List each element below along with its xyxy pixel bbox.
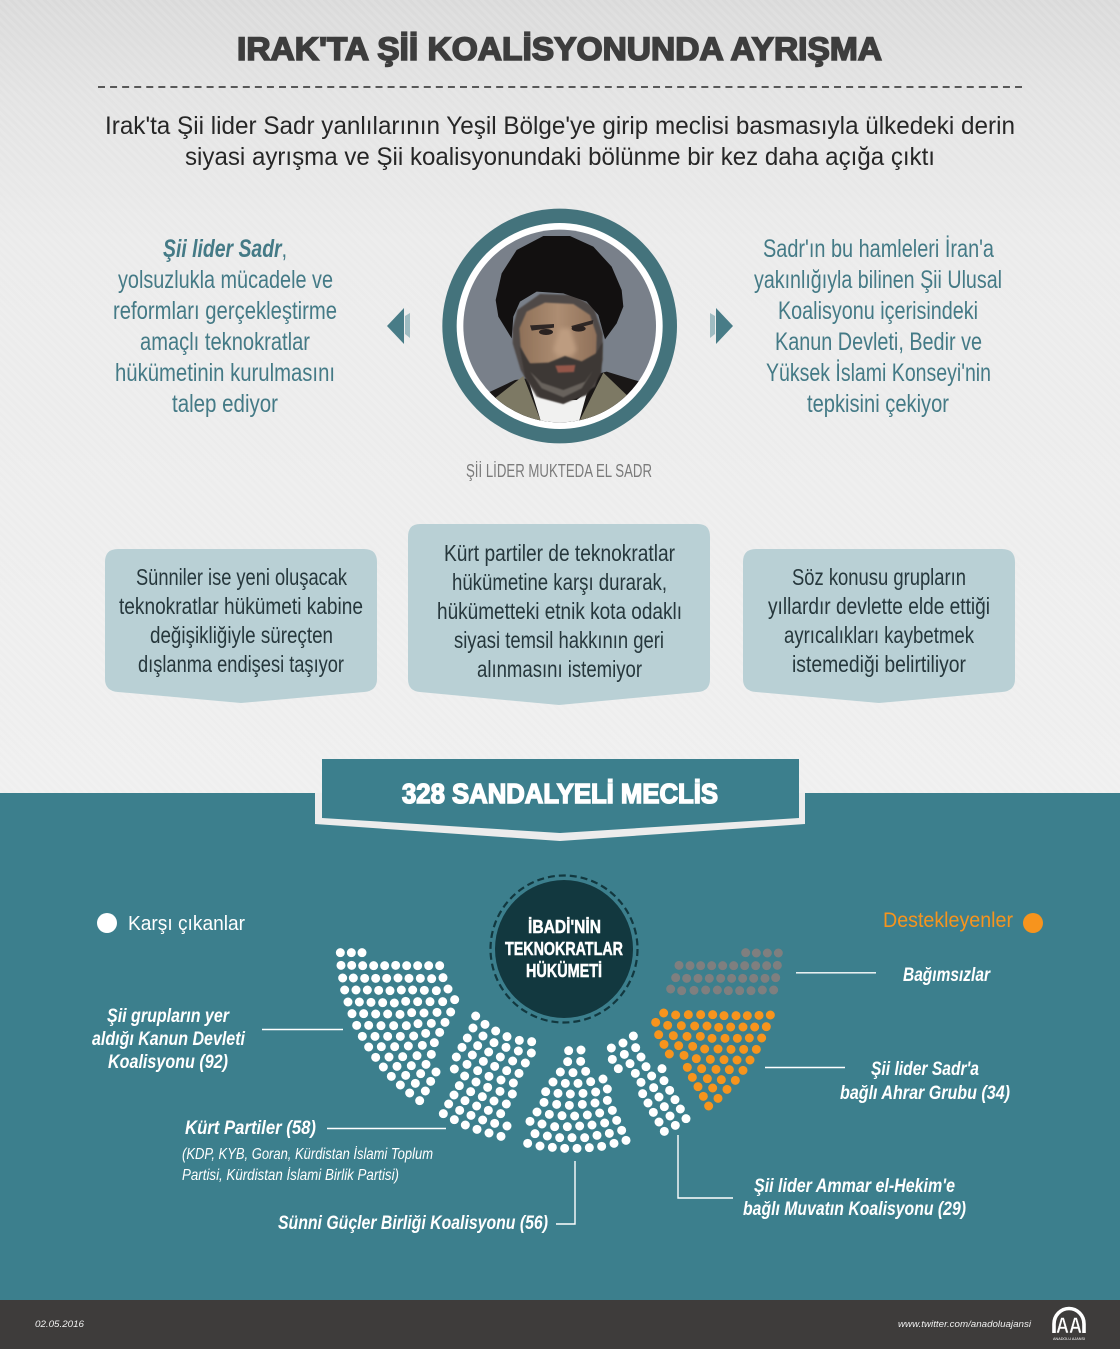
background	[0, 0, 1120, 800]
label: Kanun Devleti	[92, 1006, 343, 1073]
left text: Sadr's demand: Şii lider Sadr,	[163, 235, 287, 263]
callout: Kurds	[408, 524, 710, 705]
callout: Sunnis	[105, 549, 377, 703]
left text: Sadr's demand: yolsuzlukla mücadele ve	[118, 266, 333, 294]
label: Kanun Devleti: Koalisyonu (92)	[108, 1052, 228, 1073]
icon: Anadolu Agency logo: AA	[1056, 1313, 1082, 1338]
centre badge: Abadi technocrat government: HÜKÜMETİ	[526, 961, 602, 981]
intro text: siyasi ayrışma ve Şii koalisyonundaki bölünme bir kez daha açığa çıktı	[185, 143, 935, 171]
centre badge: Abadi technocrat government: İBADİ'NİN	[528, 917, 601, 937]
seats: Kanun Devleti (92)	[340, 953, 455, 1101]
panel: parliament	[0, 793, 1120, 1300]
callout: Kurds: hükümetine karşı durarak,	[452, 569, 667, 595]
banner: 328 seats	[315, 759, 805, 841]
left text: Sadr's demand: amaçlı teknokratlar	[140, 328, 310, 356]
callout: Kurds: alınmasını istemiyor	[477, 656, 642, 682]
right text: reaction: Koalisyonu içerisindeki	[778, 297, 978, 325]
icon: Anadolu Agency logo: ANADOLU AJANSI	[1053, 1336, 1085, 1341]
label: Ahrar: Şii lider Sadr'a	[871, 1059, 979, 1080]
label: Sünni Güçler Birliği	[278, 1161, 575, 1234]
callout: Kurds: siyasi temsil hakkının geri	[454, 627, 664, 653]
callout: Kurds: Kürt partiler de teknokratlar	[444, 540, 675, 566]
seats: Ahrar (34)	[656, 1013, 770, 1106]
label: Kanun Devleti: aldığı Kanun Devleti	[92, 1029, 246, 1050]
footer: www.twitter.com/anadoluajansi	[898, 1319, 1032, 1330]
label: Bağımsızlar: Bağımsızlar	[903, 965, 991, 986]
seats: Sünni Güçler Birliği (56)	[528, 1050, 626, 1148]
left text: Sadr's demand: reformları gerçekleştirme	[113, 297, 337, 325]
label: Ahrar: bağlı Ahrar Grubu (34)	[840, 1083, 1010, 1104]
portrait: Muqtada al-Sadr	[442, 209, 677, 443]
label: Kürt Partiler: (KDP, KYB, Goran, Kürdistan İslami Toplum	[182, 1144, 433, 1163]
label: Kanun Devleti: Şii grupların yer	[107, 1006, 230, 1027]
right text: reaction	[754, 234, 1002, 418]
callout: groups: Söz konusu grupların	[792, 564, 966, 590]
seats: Muvatın (29)	[611, 1036, 686, 1131]
callout: groups: yıllardır devlette elde ettiği	[768, 593, 990, 619]
label: Muvatın: Şii lider Ammar el-Hekim'e	[754, 1176, 955, 1197]
arrow: right	[710, 308, 733, 344]
label: Muvatın	[678, 1135, 966, 1220]
legend: supporting: Destekleyenler	[883, 909, 1013, 932]
title: IRAK'TA Şİİ KOALİSYONUNDA AYRIŞMA	[237, 31, 882, 67]
callout: groups	[743, 549, 1015, 703]
label: Sünni Güçler Birliği: Sünni Güçler Birliği Koalisyonu (56)	[278, 1213, 548, 1234]
intro text: Irak'ta Şii lider Sadr yanlılarının Yeşil Bölge'ye girip meclisi basmasıyla ülkedeki derin	[105, 112, 1015, 140]
footer: 02.05.2016	[35, 1319, 84, 1329]
callout: Kurds: hükümetteki etnik kota odaklı	[437, 598, 682, 624]
right text: reaction: yakınlığıyla bilinen Şii Ulusal	[754, 266, 1002, 294]
banner: 328 seats: 328 SANDALYELİ MECLİS	[402, 778, 718, 809]
arrow: left	[387, 308, 410, 344]
label: Muvatın: bağlı Muvatın Koalisyonu (29)	[743, 1199, 966, 1220]
footer	[0, 1300, 1120, 1349]
callout: Sunnis: Sünniler ise yeni oluşacak	[136, 564, 347, 590]
label: Kürt Partiler: Kürt Partiler (58)	[185, 1118, 316, 1139]
left text: Sadr's demand: hükümetinin kurulmasını	[115, 359, 335, 387]
label: Kürt Partiler	[182, 1118, 446, 1184]
seats: Kürt Partiler (58)	[443, 1016, 532, 1136]
intro text	[105, 112, 1015, 171]
left text: Sadr's demand	[113, 235, 337, 418]
label: Kürt Partiler: Partisi, Kürdistan İslami Birlik Partisi)	[182, 1165, 399, 1184]
right text: reaction: tepkisini çekiyor	[807, 390, 949, 418]
centre badge: Abadi technocrat government	[490, 876, 638, 1022]
callout: groups: ayrıcalıkları kaybetmek	[784, 622, 974, 648]
left text: Sadr's demand: talep ediyor	[172, 390, 278, 418]
callout: Sunnis: değişikliğiyle süreçten	[150, 622, 333, 648]
right text: reaction: Sadr'ın bu hamleleri İran'a	[763, 234, 994, 263]
seats: Bağımsızlar	[671, 953, 778, 991]
right text: reaction: Kanun Devleti, Bedir ve	[775, 328, 982, 356]
label: Ahrar	[765, 1059, 1010, 1104]
callout: Sunnis: dışlanma endişesi taşıyor	[138, 651, 344, 677]
icon: Anadolu Agency logo	[1053, 1308, 1085, 1341]
centre badge: Abadi technocrat government: TEKNOKRATLAR	[505, 939, 623, 959]
legend: opposing: Karşı çıkanlar	[128, 913, 245, 935]
callout: Sunnis: teknokratlar hükümeti kabine	[119, 593, 363, 619]
photo caption: Şİİ LİDER MUKTEDA EL SADR	[466, 461, 652, 481]
right text: reaction: Yüksek İslami Konseyi'nin	[766, 358, 991, 387]
callout: groups: istemediği belirtiliyor	[792, 651, 966, 677]
